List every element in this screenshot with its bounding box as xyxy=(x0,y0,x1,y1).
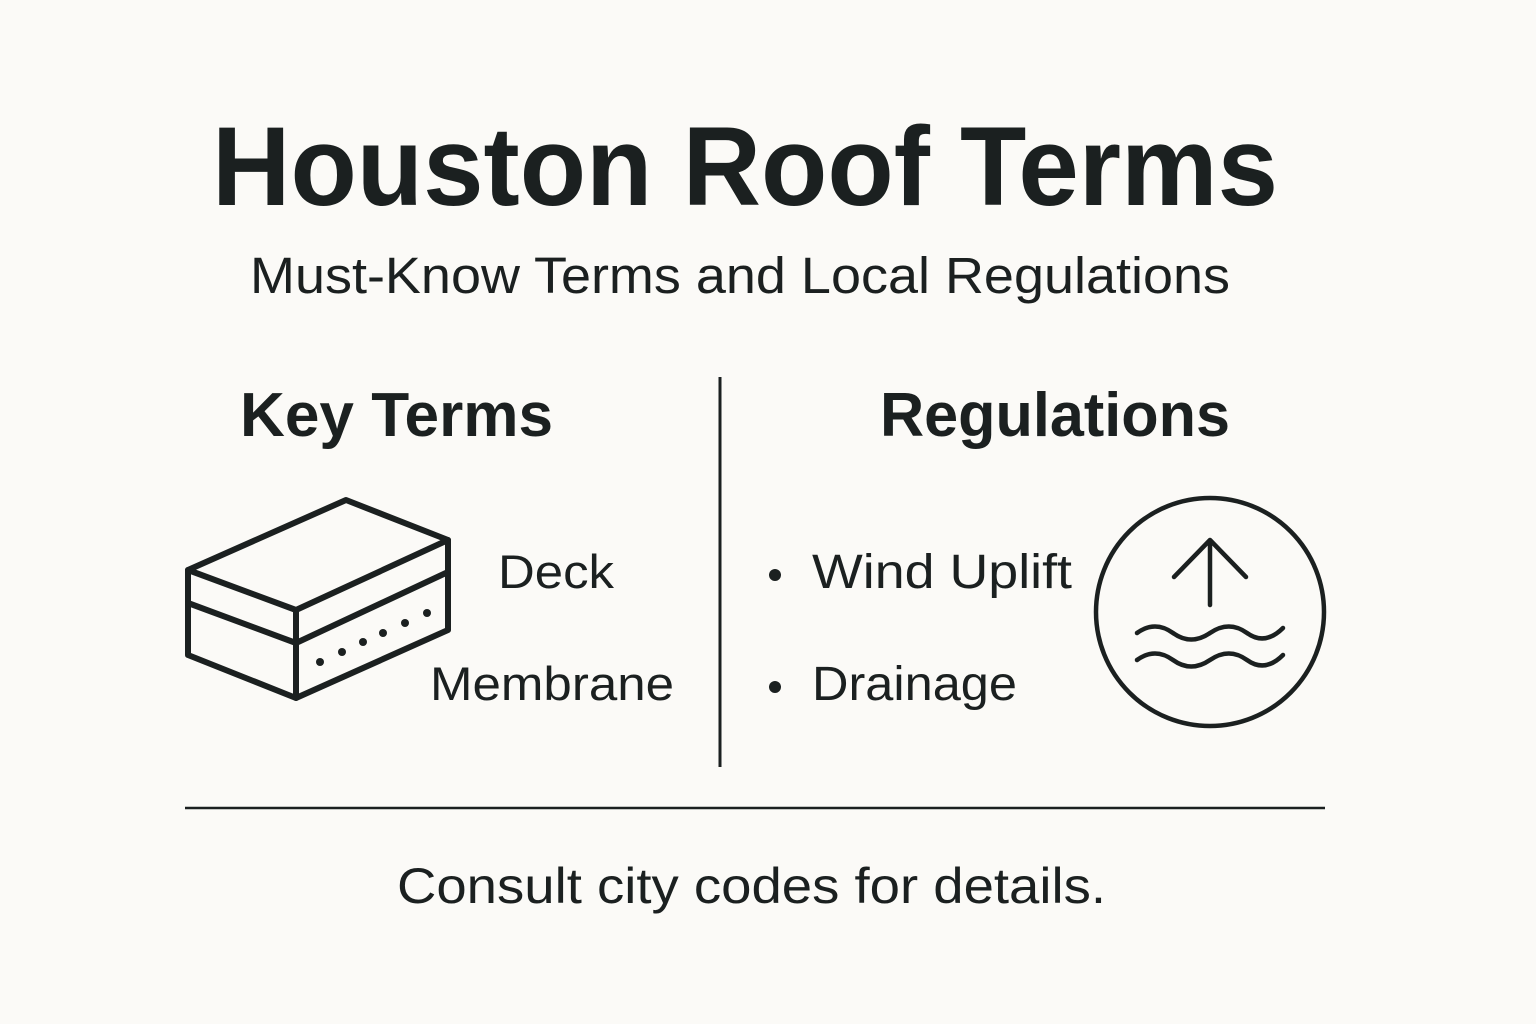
icon: wind uplift and water xyxy=(1096,498,1324,726)
label: membrane: Membrane xyxy=(430,657,674,710)
title: Houston Roof Terms xyxy=(212,104,1278,229)
label: deck: Deck xyxy=(498,545,615,598)
subtitle: Must-Know Terms and Local Regulations xyxy=(250,247,1230,304)
footer note: Consult city codes for details. xyxy=(397,858,1106,914)
heading: key terms: Key Terms xyxy=(240,381,553,450)
bullet: drainage: Drainage xyxy=(812,658,1017,711)
icon: roof layers box xyxy=(188,500,448,698)
bullet: wind uplift: Wind Uplift xyxy=(812,546,1072,599)
heading: regulations: Regulations xyxy=(880,381,1230,450)
